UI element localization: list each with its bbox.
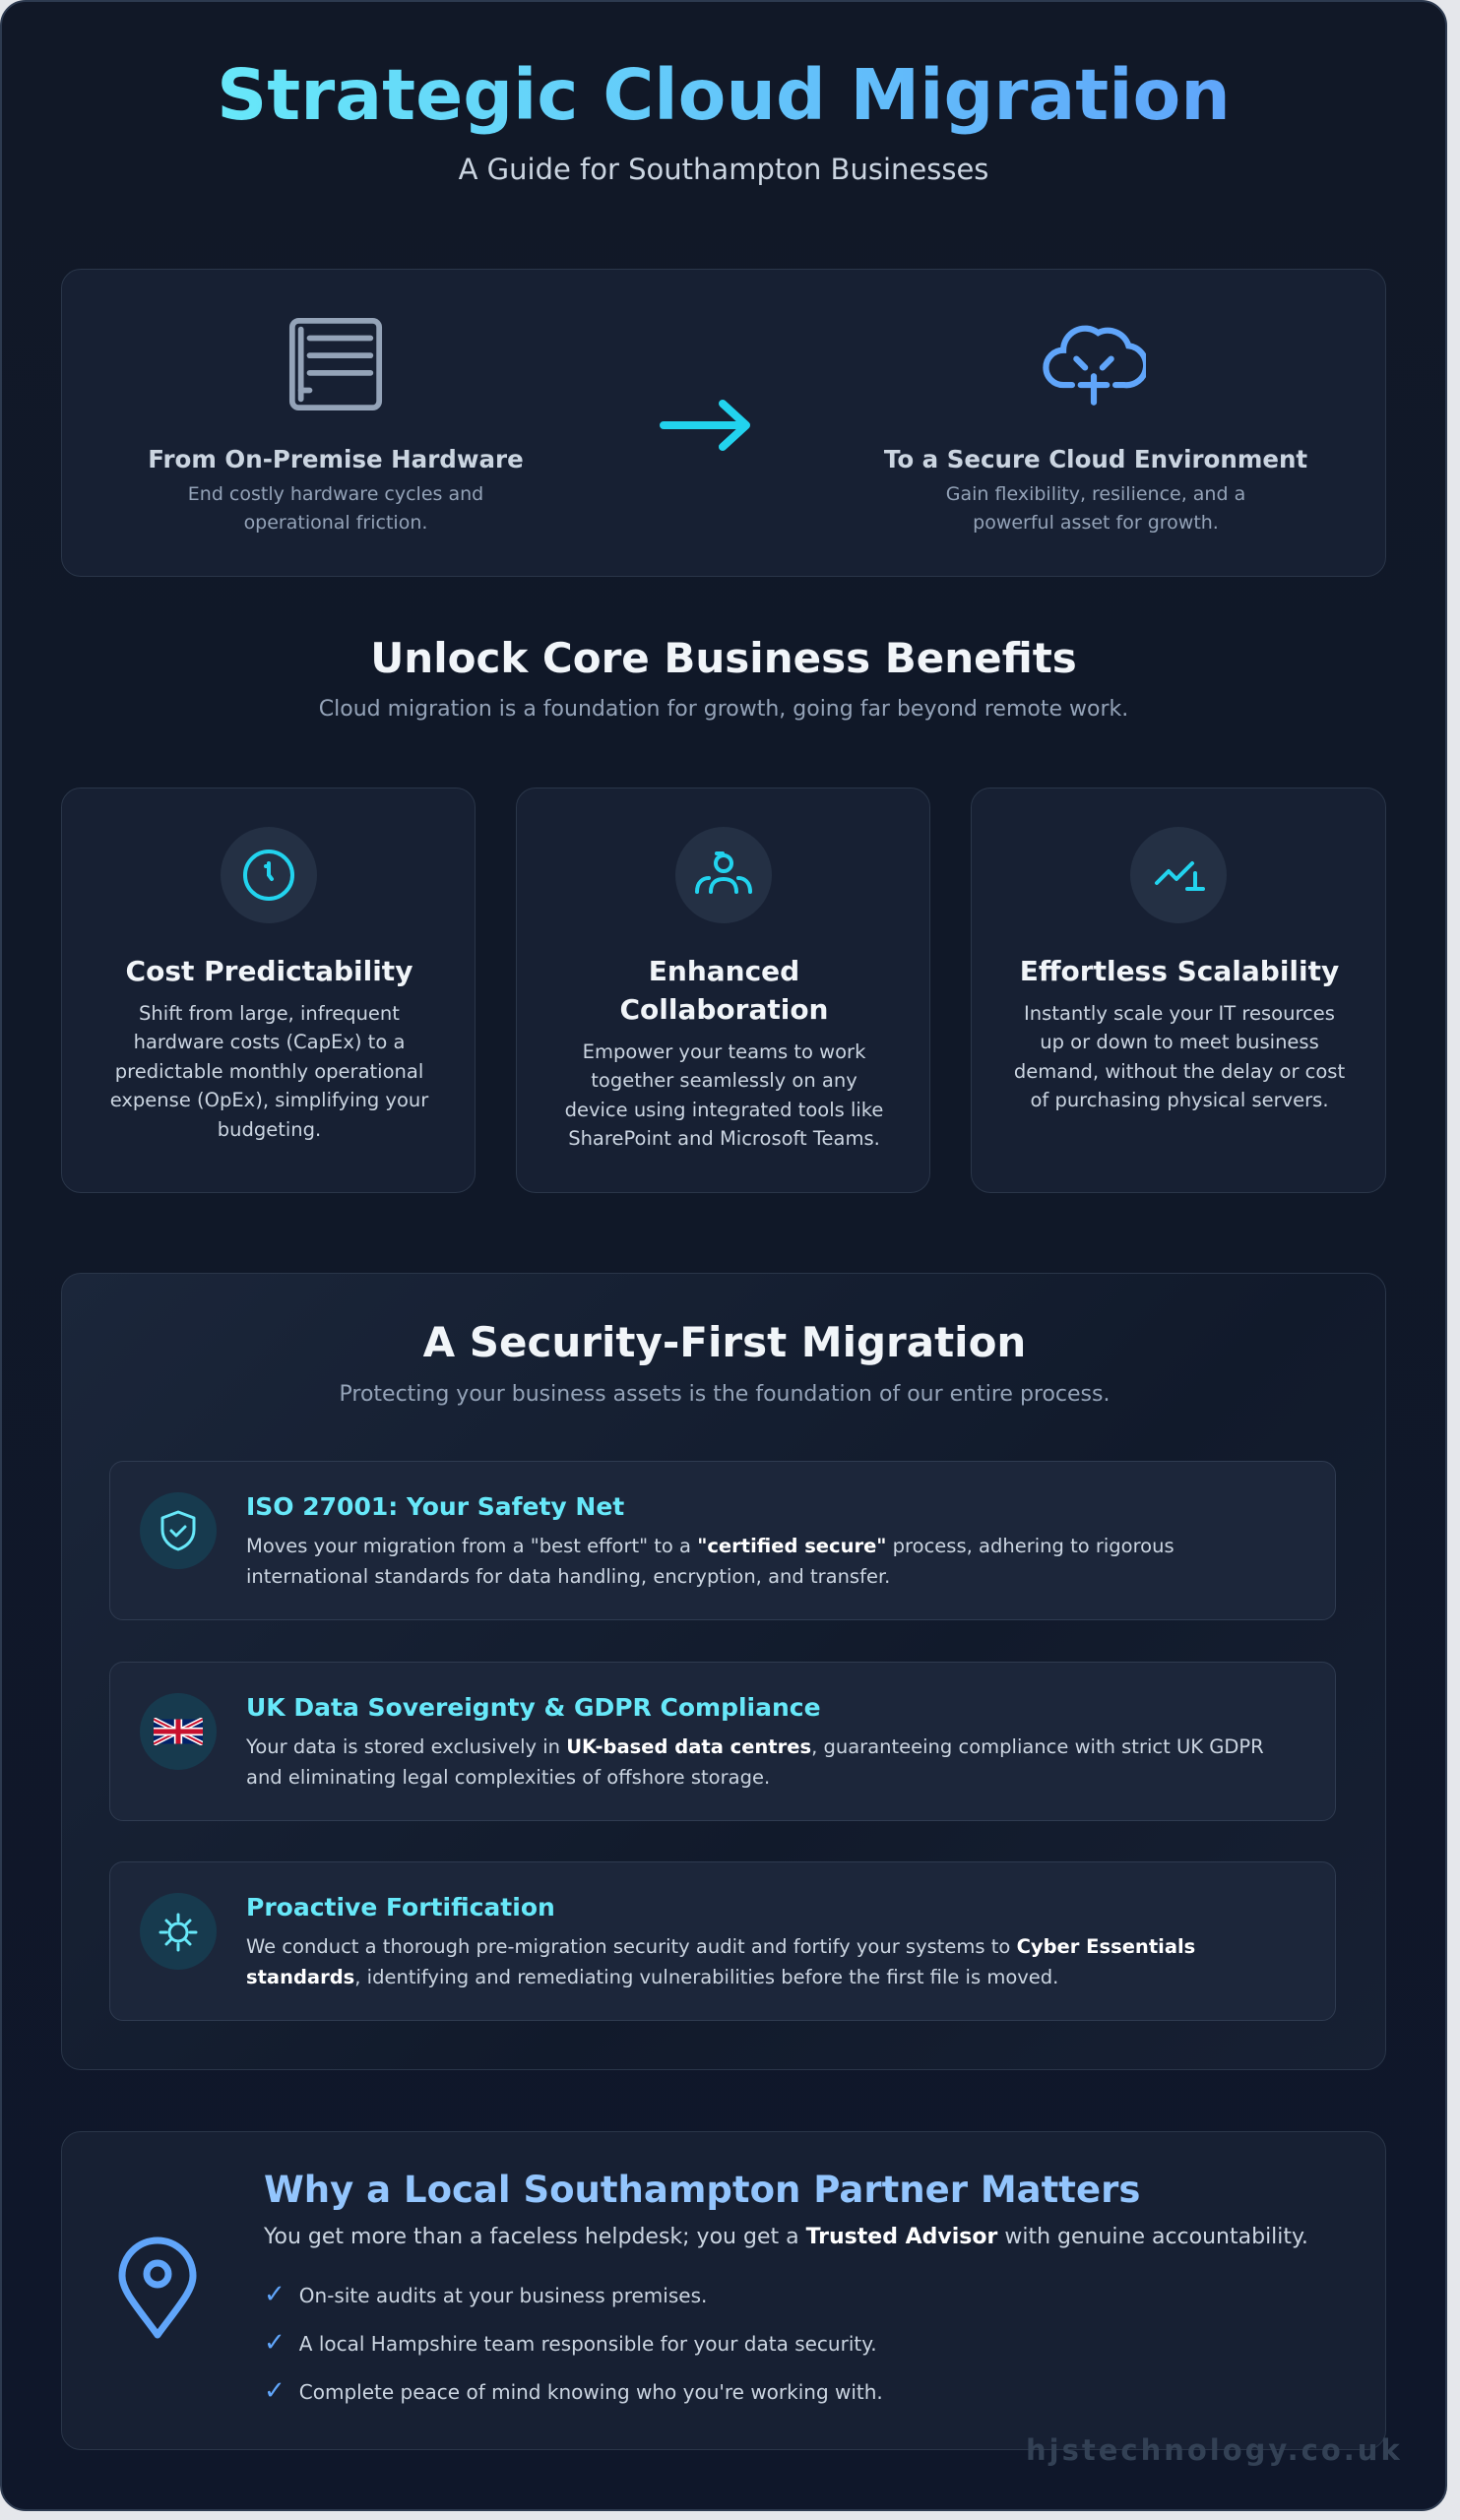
subheading: security: Protecting your business assets is the foundation of our entire process.: [339, 1382, 1110, 1407]
icon: clock: [221, 827, 317, 923]
icon: bug/sun: [140, 1893, 217, 1970]
panel: security: [61, 1273, 1386, 2070]
icon: server: [289, 318, 382, 410]
icon: location pin: [118, 2236, 197, 2339]
text: to: powerful asset for growth.: [973, 512, 1219, 534]
title: Strategic Cloud Migration: [217, 54, 1231, 136]
text: local intro: You get more than a faceless helpdesk; you get a Trusted Advisor with genuine accountability.: [264, 2225, 1308, 2249]
item: ISO 27001: ISO 27001: Your Safety Net: [246, 1492, 624, 1521]
subheading: benefits: Cloud migration is a foundation for growth, going far beyond remote work.: [319, 697, 1128, 722]
arrow: [660, 400, 750, 451]
item: proactive: We conduct a thorough pre-migration security audit and fortify your systems to Cyber Essentials standards, identifying and remediating vulnerabilities before the first file is moved.: [246, 1935, 1195, 1988]
bullet 3: ✓ Complete peace of mind knowing who you're working with.: [264, 2376, 883, 2406]
bullet 1: ✓ On-site audits at your business premises.: [264, 2280, 707, 2309]
icon: shield: [140, 1492, 217, 1569]
panel: collaboration: [516, 788, 930, 1193]
panel: from/to: [61, 269, 1386, 577]
heading: benefits: Unlock Core Business Benefits: [370, 634, 1077, 682]
panel: collaboration: Enhanced: [649, 955, 799, 987]
panel: cost predictability: Cost Predictability: [126, 955, 413, 987]
icon: cloud: [1043, 325, 1146, 406]
text: to: To a Secure Cloud Environment: [884, 445, 1307, 473]
item: ISO 27001: Moves your migration from a "best effort" to a "certified secure" process, adhering to rigorous international standards for data handling, encryption, and transfer.: [246, 1535, 1174, 1588]
text: from: [148, 445, 524, 534]
item: proactive: Proactive Fortification: [246, 1893, 555, 1922]
subtitle: A Guide for Southampton Businesses: [459, 153, 988, 186]
icon: chart: [1130, 827, 1227, 923]
icon: UK flag: [140, 1693, 217, 1770]
panel: scalability: Effortless Scalability: [1020, 955, 1339, 987]
heading: security: A Security-First Migration: [423, 1318, 1026, 1366]
icon: people: [675, 827, 772, 923]
watermark: hjstechnology.co.uk: [1026, 2433, 1403, 2467]
panel: scalability: Instantly scale your IT resources up or down to meet business demand, without the delay or cost of purchasing physical servers.: [1014, 1002, 1345, 1111]
heading: local partner: Why a Local Southampton Partner Matters: [264, 2169, 1140, 2211]
text: from: End costly hardware cycles and: [188, 483, 483, 505]
panel: cost predictability: Shift from large, infrequent hardware costs (CapEx) to a predictable monthly operational expense (OpEx), simplifying your budgeting.: [110, 1002, 428, 1141]
panel: cost predictability: [61, 788, 476, 1193]
panel: scalability: [971, 788, 1386, 1193]
item: UK data: UK Data Sovereignty & GDPR Compliance: [246, 1693, 821, 1722]
bullet 2: ✓ A local Hampshire team responsible for your data security.: [264, 2328, 877, 2358]
item: UK data: [109, 1662, 1336, 1821]
item: ISO 27001: [109, 1461, 1336, 1620]
text: to: Gain flexibility, resilience, and a: [946, 483, 1245, 505]
panel: collaboration: Empower your teams to work together seamlessly on any device using integrated tools like SharePoint and Microsoft Teams.: [565, 1040, 883, 1150]
item: proactive: [109, 1861, 1336, 2021]
text: from: From On-Premise Hardware: [148, 445, 524, 473]
panel: collaboration: Collaboration: [619, 993, 829, 1026]
text: from: operational friction.: [244, 512, 427, 534]
text: to: [884, 445, 1307, 534]
item: UK data: Your data is stored exclusively in UK-based data centres, guaranteeing compliance with strict UK GDPR and eliminating legal complexities of offshore storage.: [246, 1735, 1264, 1789]
panel: local partner: [61, 2131, 1386, 2450]
